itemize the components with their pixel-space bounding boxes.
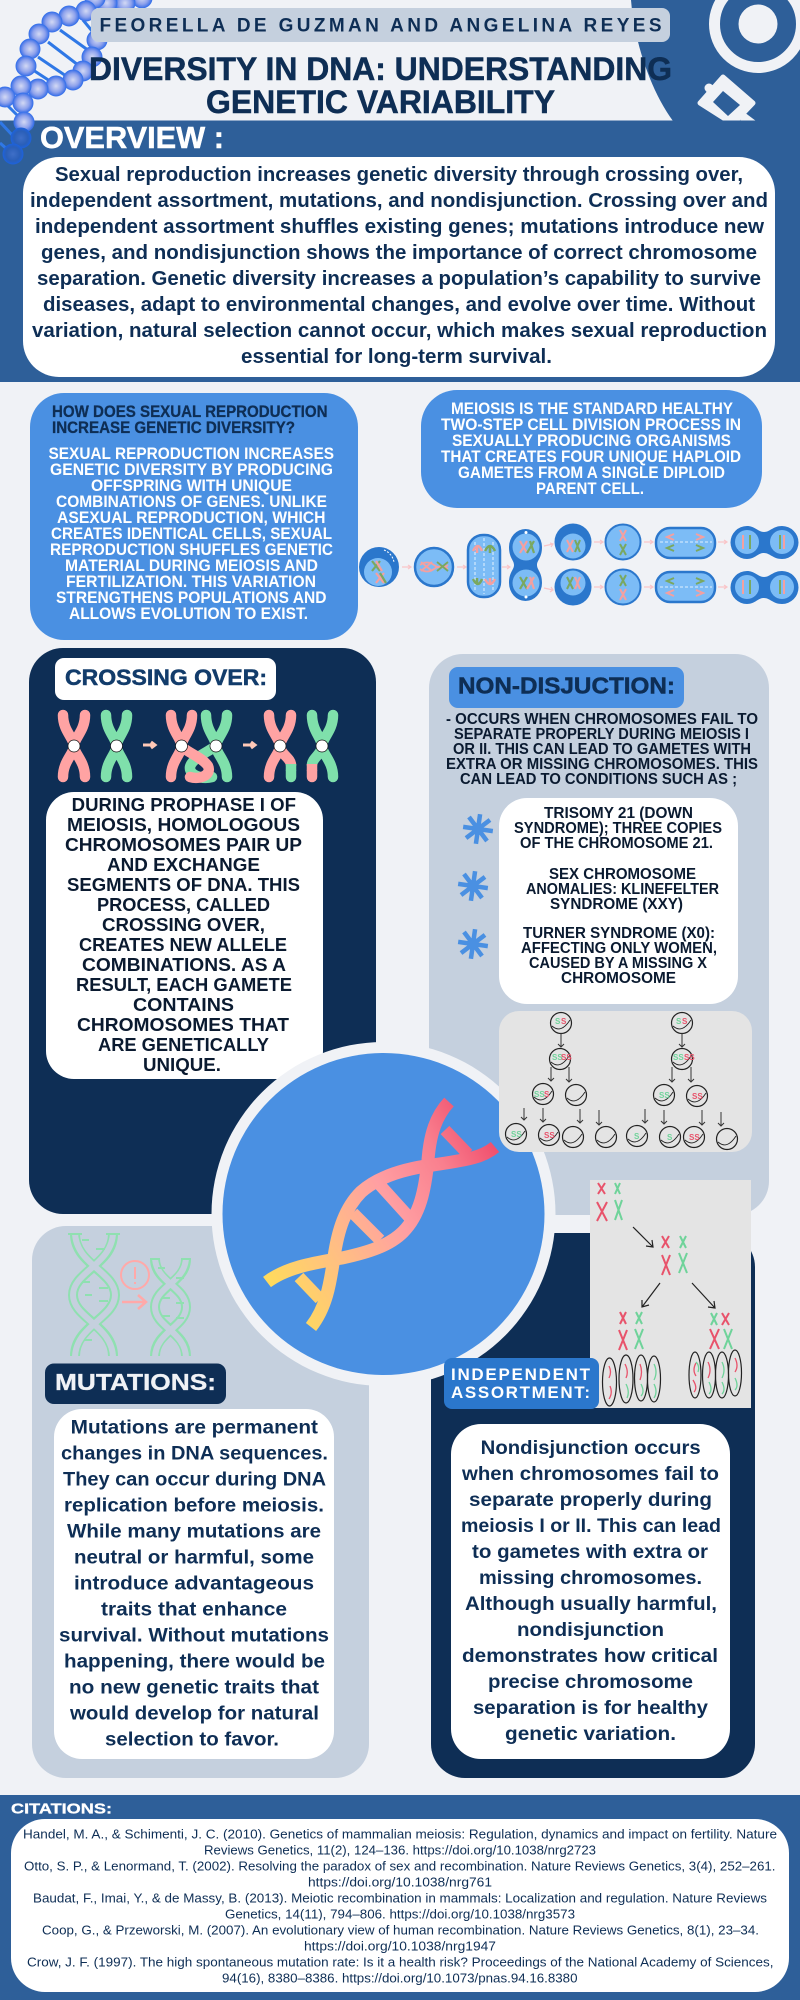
- text card: crossing over: CREATES NEW ALLELE: [79, 934, 287, 955]
- text: non-disjunction description: [446, 711, 758, 788]
- text card: independent assortment: meiosis I or II. This can lead: [461, 1515, 721, 1537]
- question heading: INCREASE GENETIC DIVERSITY?: [52, 419, 295, 437]
- answer text: REPRODUCTION SHUFFLES GENETIC: [50, 541, 333, 559]
- text card: mutations: happening, there would be: [64, 1650, 325, 1672]
- icon: gradient DNA helix: [267, 1102, 495, 1327]
- icon: DNA mutation helices: [68, 1232, 191, 1358]
- citation list: 94(16), 8380–8386. https://doi.org/10.1073/pnas.94.16.8380: [222, 1972, 578, 1986]
- diagram: non-disjunction gametes: S: [667, 1133, 673, 1142]
- text card: mutations: survival. Without mutations: [59, 1624, 329, 1646]
- text card: crossing over: ARE GENETICALLY: [98, 1034, 270, 1055]
- heading: citations: CITATIONS:: [11, 1800, 112, 1818]
- citation list: Otto, S. P., & Lenormand, T. (2002). Resolving the paradox of sex and recombination. Nature Reviews Genetics, 3(4), 252–261.: [24, 1860, 776, 1874]
- text card: conditions: AFFECTING ONLY WOMEN,: [521, 940, 717, 957]
- panel: overview text: [23, 157, 775, 377]
- text: non-disjunction description: - OCCURS WHEN CHROMOSOMES FAIL TO: [446, 711, 758, 728]
- diagram: non-disjunction gametes: S: [561, 1017, 567, 1026]
- answer text: STRENGTHENS POPULATIONS AND: [56, 589, 327, 607]
- diagram: non-disjunction gametes: S: [634, 1132, 640, 1141]
- stage 8: [730, 526, 798, 559]
- text card: crossing over: CHROMOSOMES PAIR UP: [65, 834, 302, 855]
- text card: mutations: introduce advantageous: [74, 1572, 314, 1594]
- central circle with DNA helix: [212, 1042, 556, 1386]
- diagram: non-disjunction gametes: S: [682, 1017, 688, 1026]
- text card: independent assortment: separate properly during: [469, 1489, 712, 1511]
- text card: independent assortment: separation is for healthy: [473, 1697, 708, 1719]
- panel: meiosis definition: MEIOSIS IS THE STANDARD HEALTHY: [451, 400, 733, 418]
- diagram: non-disjunction gametes: SS: [544, 1131, 555, 1140]
- panel: meiosis definition: PARENT CELL.: [536, 480, 644, 498]
- text: non-disjunction description: EXTRA OR MISSING CHROMOSOMES. THIS: [446, 756, 758, 773]
- citation list: Baudat, F., Imai, Y., & de Massy, B. (2013). Meiotic recombination in mammals: Localization and regulation. Nature Reviews: [33, 1892, 767, 1906]
- text card: conditions: SYNDROME (XXY): [550, 896, 683, 913]
- heading: overview: OVERVIEW :: [40, 120, 224, 155]
- text card: independent assortment: missing chromosomes.: [479, 1567, 702, 1589]
- text card: independent assortment: when chromosomes fail to: [461, 1463, 719, 1485]
- citation list: Crow, J. F. (1997). The high spontaneous mutation rate: Is it a health risk? Proceedings of the National Academy of Sciences,: [27, 1956, 774, 1970]
- answer text: OFFSPRING WITH UNIQUE: [91, 477, 292, 495]
- text card: independent assortment: Nondisjunction occurs: [481, 1437, 701, 1459]
- panel: meiosis definition: THAT CREATES FOUR UNIQUE HAPLOID: [441, 448, 741, 466]
- text card: crossing over: COMBINATIONS. AS A: [82, 954, 286, 975]
- answer text: ALLOWS EVOLUTION TO EXIST.: [69, 605, 308, 623]
- answer text: [48, 445, 334, 623]
- text card: mutations: selection to favor.: [105, 1728, 279, 1750]
- text card: mutations: Mutations are permanent: [71, 1416, 319, 1438]
- text card: independent assortment: precise chromosome: [488, 1671, 693, 1693]
- text card: independent assortment: demonstrates how critical: [462, 1645, 718, 1667]
- panel: overview text: variation, natural selection cannot occur, which makes sexual reproduction: [32, 320, 767, 342]
- text card: mutations: would develop for natural: [69, 1702, 319, 1724]
- text card: conditions: TRISOMY 21 (DOWN: [544, 805, 693, 822]
- panel: overview text: independent assortment shuffles existing genes; mutations introduce new: [35, 216, 764, 238]
- text card: mutations: neutral or harmful, some: [74, 1546, 314, 1568]
- panel: citations: [0, 1795, 800, 2000]
- answer text: MATERIAL DURING MEIOSIS AND: [65, 557, 318, 575]
- panel: overview text: separation. Genetic diversity increases a population’s capability to survive: [37, 268, 761, 290]
- heading: mutations: MUTATIONS:: [55, 1369, 216, 1395]
- text card: conditions: TURNER SYNDROME (X0):: [523, 925, 715, 942]
- text card: crossing over: CONTAINS: [133, 994, 234, 1015]
- text: non-disjunction description: OR II. THIS CAN LEAD TO GAMETES WITH: [453, 741, 751, 758]
- citation list: https://doi.org/10.1038/nrg761: [308, 1876, 492, 1890]
- author pill: [91, 8, 670, 42]
- text card: independent assortment: genetic variation.: [505, 1723, 676, 1745]
- text card: mutations: They can occur during DNA: [63, 1468, 326, 1490]
- panel: meiosis definition: [421, 390, 762, 508]
- stage 5: [554, 524, 592, 560]
- panel: overview text: independent assortment, mutations, and nondisjunction. Crossing over and: [30, 190, 768, 212]
- text card: conditions: SEX CHROMOSOME: [549, 866, 696, 883]
- heading: crossing over: [55, 658, 276, 700]
- stage 6: [606, 524, 640, 560]
- text card: mutations: no new genetic traits that: [69, 1676, 320, 1698]
- text card: conditions: OF THE CHROMOSOME 21.: [520, 835, 713, 852]
- answer text: COMBINATIONS OF GENES. UNLIKE: [56, 493, 327, 511]
- stage 3: [468, 535, 500, 597]
- answer text: SEXUAL REPRODUCTION INCREASES: [48, 445, 334, 463]
- text card: crossing over: SEGMENTS OF DNA. THIS: [67, 874, 300, 895]
- question heading: HOW DOES SEXUAL REPRODUCTION: [52, 403, 328, 421]
- panel: how does sexual reproduction increase diversity: [30, 393, 358, 640]
- text card: crossing over: DURING PROPHASE I OF: [72, 794, 296, 815]
- text card: mutations: [54, 1409, 334, 1759]
- text: non-disjunction description: CAN LEAD TO CONDITIONS SUCH AS ;: [460, 771, 737, 788]
- diagram: non-disjunction gametes: S: [676, 1017, 682, 1026]
- citation list: [11, 1819, 789, 1992]
- title: [89, 51, 672, 120]
- diagram: independent assortment chromosomes: [590, 1180, 751, 1408]
- text card: conditions: [499, 798, 738, 1004]
- question heading: [52, 403, 328, 437]
- diagram: non-disjunction gametes: SS: [673, 1053, 684, 1062]
- panel: overview text: Sexual reproduction increases genetic diversity through crossing over,: [55, 164, 743, 186]
- stage 4: [509, 529, 542, 601]
- answer text: FERTILIZATION. THIS VARIATION: [66, 573, 316, 591]
- diagram: non-disjunction gametes: SS: [534, 1090, 545, 1099]
- text card: crossing over: PROCESS, CALLED: [97, 894, 270, 915]
- diagram: non-disjunction gametes: SS: [552, 1053, 563, 1062]
- heading: independent assortment: ASSORTMENT:: [451, 1383, 590, 1402]
- overview band background: [0, 120, 800, 382]
- icons: blue asterisks: [456, 812, 495, 961]
- citation list: Coop, G., & Przeworski, M. (2007). An evolutionary view of human recombination. Nature Reviews Genetics, 8(1), 23–34.: [42, 1924, 759, 1938]
- text card: mutations: replication before meiosis.: [64, 1494, 324, 1516]
- panel: meiosis definition: SEXUALLY PRODUCING ORGANISMS: [452, 432, 731, 450]
- stage 7: [656, 528, 715, 558]
- answer text: CREATES IDENTICAL CELLS, SEXUAL: [51, 525, 332, 543]
- author pill: FEORELLA DE GUZMAN AND ANGELINA REYES: [100, 16, 662, 36]
- diagram: non-disjunction gametes: S: [544, 1090, 550, 1099]
- panel: independent assortment: [431, 1233, 755, 1778]
- diagram: non-disjunction gametes: [499, 1011, 752, 1152]
- text card: crossing over: CROSSING OVER,: [102, 914, 265, 935]
- text: non-disjunction description: SEPARATE PROPERLY DURING MEIOSIS I: [454, 726, 749, 743]
- diagram: non-disjunction gametes: SS: [659, 1091, 670, 1100]
- text card: conditions: CAUSED BY A MISSING X: [529, 955, 708, 972]
- stage 1: [359, 547, 399, 587]
- diagram: non-disjunction gametes: SS: [689, 1133, 700, 1142]
- text card: independent assortment: to gametes with extra or: [472, 1541, 708, 1563]
- heading: non-disjunction: NON-DISJUCTION:: [458, 672, 675, 698]
- header decoration: blue corner shape: [631, 0, 800, 124]
- text card: conditions: SYNDROME); THREE COPIES: [514, 820, 722, 837]
- title: DIVERSITY IN DNA: UNDERSTANDING: [89, 51, 672, 87]
- panel: overview text: essential for long-term survival.: [241, 346, 552, 368]
- heading: non-disjunction: [449, 667, 684, 708]
- panel: overview text: genes, and nondisjunction shows the importance of correct chromosome: [41, 242, 757, 264]
- panel: crossing over: [29, 648, 376, 1214]
- panel: meiosis definition: TWO-STEP CELL DIVISION PROCESS IN: [441, 416, 741, 434]
- heading: independent assortment: INDEPENDENT: [451, 1365, 591, 1384]
- diagram: non-disjunction gametes: SS: [692, 1092, 703, 1101]
- answer text: ASEXUAL REPRODUCTION, WHICH: [57, 509, 326, 527]
- text card: crossing over: UNIQUE.: [143, 1054, 221, 1075]
- panel: meiosis definition: GAMETES FROM A SINGLE DIPLOID: [458, 464, 725, 482]
- heading: mutations: [45, 1364, 226, 1404]
- text card: conditions: CHROMOSOME: [561, 970, 676, 987]
- text card: independent assortment: Although usually harmful,: [465, 1593, 717, 1615]
- text card: mutations: changes in DNA sequences.: [61, 1442, 328, 1464]
- text card: crossing over: AND EXCHANGE: [107, 854, 260, 875]
- diagram: non-disjunction gametes: SS: [561, 1053, 572, 1062]
- text card: crossing over: [46, 792, 323, 1079]
- diagram: non-disjunction gametes: SS: [511, 1130, 522, 1139]
- citation list: https://doi.org/10.1038/nrg1947: [304, 1940, 496, 1954]
- text card: crossing over: RESULT, EACH GAMETE: [76, 974, 292, 995]
- text card: conditions: ANOMALIES: KLINEFELTER: [526, 881, 719, 898]
- heading: crossing over: CROSSING OVER:: [65, 665, 267, 690]
- diagram: non-disjunction gametes: S: [555, 1017, 561, 1026]
- icon: blue DNA helix of beads: [0, 0, 152, 164]
- citation list: Handel, M. A., & Schimenti, J. C. (2010). Genetics of mammalian meiosis: Regulation, dynamics and impact on fertility. Nature: [23, 1828, 777, 1842]
- text card: mutations: traits that enhance: [101, 1598, 287, 1620]
- panel: overview text: diseases, adapt to environmental changes, and evolve over time. Without: [43, 294, 755, 316]
- heading: independent assortment: [444, 1358, 599, 1409]
- text card: crossing over: CHROMOSOMES THAT: [77, 1014, 290, 1035]
- stage 2: [415, 548, 453, 586]
- text card: crossing over: MEIOSIS, HOMOLOGOUS: [67, 814, 300, 835]
- title: GENETIC VARIABILITY: [206, 84, 555, 120]
- text card: independent assortment: nondisjunction: [517, 1619, 664, 1641]
- diagram: non-disjunction gametes: SS: [684, 1053, 695, 1062]
- panel: mutations: [32, 1226, 369, 1778]
- citation list: Reviews Genetics, 11(2), 124–136. https://doi.org/10.1038/nrg2723: [204, 1844, 596, 1858]
- diagram: meiosis stages: [359, 524, 798, 606]
- answer text: GENETIC DIVERSITY BY PRODUCING: [50, 461, 333, 479]
- diagram: chromosome exchange: [63, 715, 333, 778]
- text card: mutations: While many mutations are: [67, 1520, 321, 1542]
- panel: non-disjunction: [429, 654, 769, 1215]
- text card: independent assortment: [451, 1424, 730, 1759]
- citation list: Genetics, 14(11), 794–806. https://doi.org/10.1038/nrg3573: [225, 1908, 575, 1922]
- arrows between stages: [402, 540, 727, 592]
